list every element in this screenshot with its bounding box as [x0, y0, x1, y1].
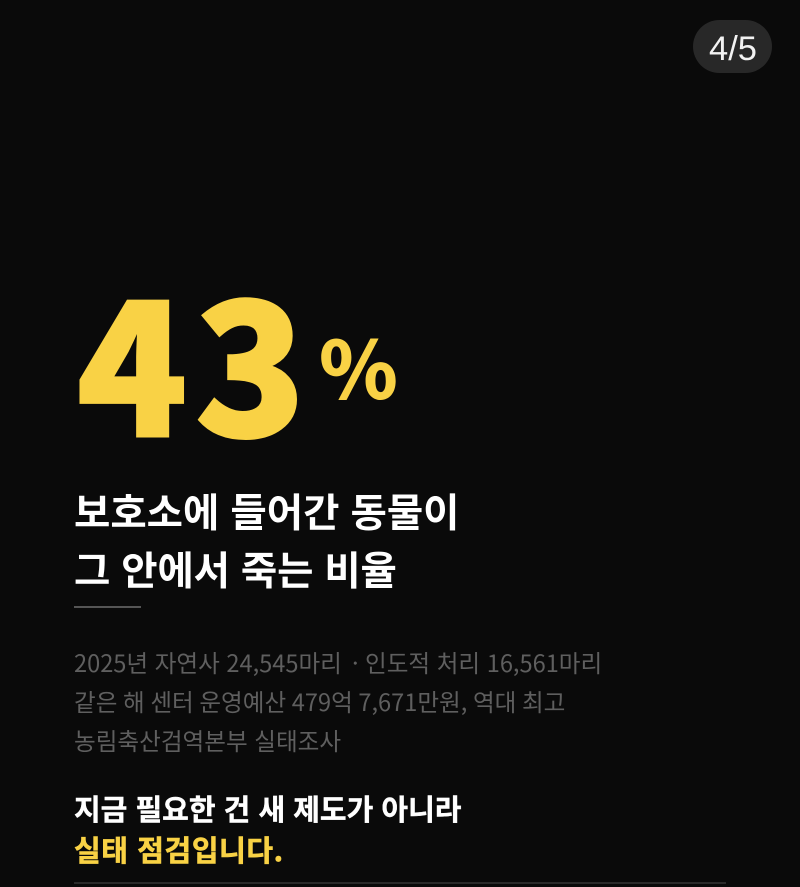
supporting facts: 2025년 자연사 24,545마리	[74, 645, 342, 679]
heading: 보호소에 들어간 동물이	[74, 482, 460, 539]
closing message: 실태 점검입니다.	[74, 828, 284, 870]
supporting facts: 농림축산검역본부 실태조사	[74, 723, 341, 757]
closing message: 지금 필요한 건 새 제도가 아니라	[74, 787, 462, 829]
closing message	[74, 787, 462, 870]
heading underline	[74, 606, 141, 608]
page badge: 4/5	[709, 30, 757, 68]
supporting facts: ·	[352, 645, 359, 679]
heading: 그 안에서 죽는 비율	[74, 540, 397, 597]
supporting facts: 같은 해 센터 운영예산 479억 7,671만원, 역대 최고	[74, 684, 565, 718]
supporting facts: 인도적 처리 16,561마리	[365, 645, 602, 679]
bottom divider	[74, 882, 726, 884]
big statistic: 43%: 43	[77, 227, 313, 489]
heading	[74, 482, 460, 597]
page badge	[693, 20, 772, 73]
supporting facts	[74, 645, 602, 757]
big statistic: 43%: %	[319, 307, 398, 423]
